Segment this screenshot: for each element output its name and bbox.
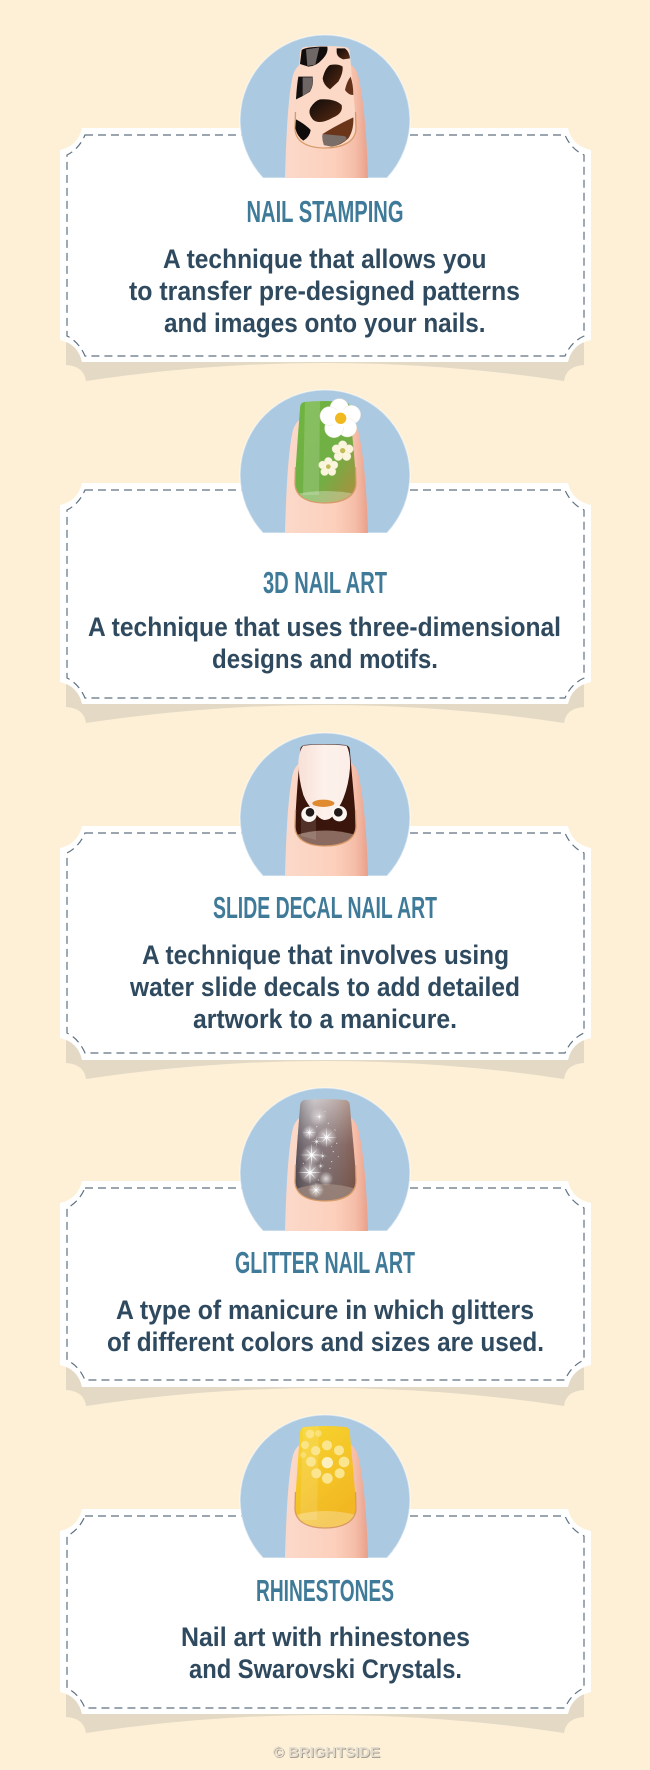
description: to transfer pre-designed patterns	[129, 276, 520, 306]
heading: 3D NAIL ART	[263, 565, 387, 600]
heading: RHINESTONES	[256, 1573, 394, 1608]
description: A technique that involves using	[142, 940, 509, 970]
description: and images onto your nails.	[164, 308, 486, 338]
card body	[60, 826, 591, 1060]
icon: yellow nail with rhinestones	[240, 1415, 410, 1558]
description	[129, 940, 520, 1034]
description: of different colors and sizes are used.	[107, 1327, 544, 1357]
description: designs and motifs.	[212, 644, 438, 674]
description: Nail art with rhinestones	[181, 1622, 470, 1652]
panel: 3D nail art	[60, 390, 591, 723]
card shadow	[66, 1036, 584, 1079]
heading: GLITTER NAIL ART	[235, 1245, 415, 1280]
description: water slide decals to add detailed	[129, 972, 520, 1002]
description: artwork to a manicure.	[193, 1004, 457, 1034]
icon: penguin decal nail	[240, 733, 410, 876]
heading: NAIL STAMPING	[246, 194, 404, 229]
card body	[60, 128, 591, 362]
card body	[60, 1509, 591, 1714]
description: A technique that allows you	[163, 244, 486, 274]
heading: SLIDE DECAL NAIL ART	[213, 890, 437, 925]
panel: glitter nail art	[60, 1088, 591, 1406]
card shadow	[66, 680, 584, 723]
panel: nail stamping	[60, 35, 591, 381]
description	[181, 1622, 470, 1684]
icon: green nail with 3D flowers	[240, 390, 410, 533]
watermark: © BRIGHTSIDE	[274, 1745, 381, 1762]
icon: nail with animal print	[240, 35, 410, 178]
description	[129, 244, 520, 338]
description: and Swarovski Crystals.	[189, 1654, 462, 1684]
card shadow	[66, 1690, 584, 1733]
icon: glitter nail	[240, 1088, 410, 1231]
card body	[60, 1181, 591, 1387]
description: A technique that uses three-dimensional	[88, 612, 561, 642]
description	[88, 612, 561, 674]
description	[107, 1295, 544, 1357]
watermark: © BRIGHTSIDE	[273, 1744, 380, 1761]
description: A type of manicure in which glitters	[116, 1295, 534, 1325]
panel: rhinestones	[60, 1415, 591, 1733]
card body	[60, 483, 591, 704]
card shadow	[66, 338, 584, 381]
card shadow	[66, 1363, 584, 1406]
panel: slide decal nail art	[60, 733, 591, 1079]
